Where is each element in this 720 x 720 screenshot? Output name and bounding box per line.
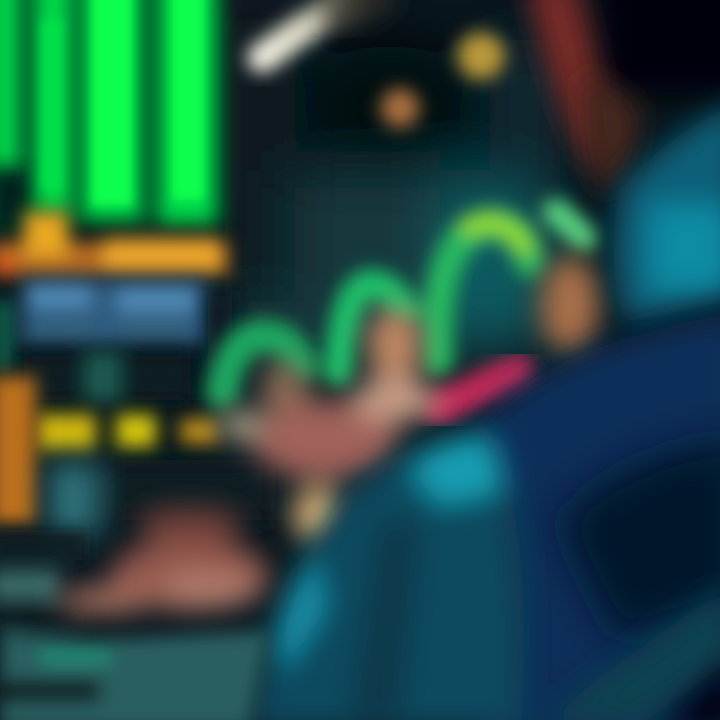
person: hair and head [525, 0, 720, 195]
monitor: orange side bar [0, 376, 36, 526]
person: teal sleeve [250, 430, 720, 720]
monitor: lower teal bar [48, 460, 275, 542]
monitor: orange band [0, 212, 228, 276]
green chart wave [222, 212, 584, 392]
bottom-right shadow [660, 655, 720, 720]
person: dark back shadow [560, 440, 720, 640]
monitor: yellow blocks [36, 414, 218, 450]
typing hand [57, 507, 270, 614]
background glow [225, 0, 560, 360]
bokeh light: orange [380, 88, 420, 128]
chart hands and fingers [218, 255, 600, 543]
lamp haze [330, 0, 390, 20]
ceiling lamp [262, 0, 345, 58]
person: teal collar [614, 100, 720, 322]
pink chart segment [440, 372, 518, 408]
monitor: blue blocks [0, 280, 208, 370]
keyboard [0, 530, 270, 720]
bokeh light: yellow [457, 32, 505, 80]
person: navy shoulder [470, 312, 720, 720]
monitor: dark row [24, 290, 232, 402]
monitor: green bars [0, 0, 225, 230]
